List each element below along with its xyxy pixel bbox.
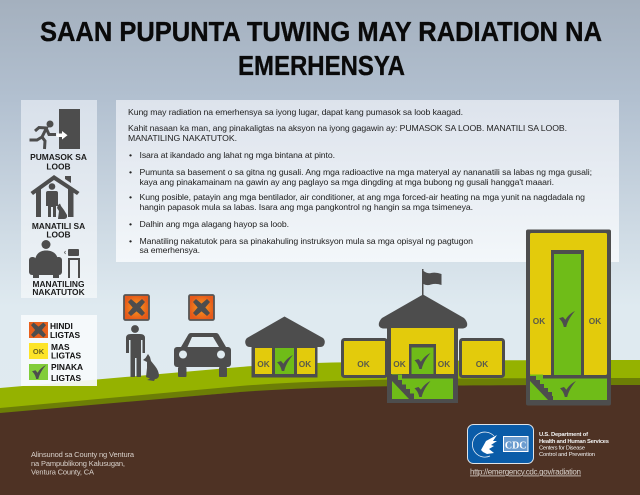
- instructions text: Dalhin ang mga alagang hayop sa loob.: [140, 219, 289, 229]
- source credit: Ventura County, CA: [31, 468, 94, 476]
- building: tall tower: OK: [589, 316, 601, 326]
- building: tall tower: OK: [533, 316, 545, 326]
- walls: [387, 327, 458, 403]
- icon: unsafe sign over person: [124, 295, 149, 320]
- label: pumasok sa loob: LOOB: [46, 162, 71, 172]
- brown ground: [0, 385, 640, 495]
- instructions text: •: [129, 167, 132, 177]
- instructions text: [128, 107, 592, 255]
- building: left wing: [342, 340, 386, 376]
- label: manatili sa loob: [32, 221, 85, 240]
- icon: person in armchair with radio: [29, 240, 80, 278]
- panel: instructions: [116, 100, 619, 262]
- label: pumasok sa loob: [30, 152, 87, 172]
- building: tall tower: [526, 230, 611, 406]
- instructions text: MANATILING NAKATUTOK.: [128, 133, 237, 143]
- basement: [392, 374, 453, 399]
- flag: [422, 269, 442, 296]
- instructions text: Isara at ikandado ang lahat ng mga bintana at pinto.: [140, 150, 335, 160]
- agency name: [539, 432, 609, 458]
- grass hill: [0, 360, 640, 413]
- icon: person entering door: [30, 109, 80, 149]
- legend: safest: LIGTAS: [51, 373, 81, 383]
- grass shadow: [0, 378, 640, 414]
- logo: CDC HHS: CDC: [505, 440, 527, 452]
- building: small house: OK: [257, 359, 270, 369]
- legend: unsafe: LIGTAS: [50, 330, 80, 340]
- roof: [379, 294, 467, 328]
- title: SAAN PUPUNTA TUWING MAY RADIATION NA: [40, 16, 602, 47]
- legend: unsafe: [29, 321, 80, 340]
- legend: safest: [29, 362, 83, 383]
- instructions text: Manatiling nakatutok para sa pinakahuling instruksyon mula sa mga opisyal ng pagtugon: [140, 236, 473, 246]
- icon: car: [174, 333, 231, 377]
- icon: person outdoors: [126, 325, 145, 377]
- agency name: U.S. Department of: [539, 432, 588, 438]
- instructions text: sa emerhensya.: [140, 245, 200, 255]
- instructions text: Kahit nasaan ka man, ang pinakaligtas na aksyon na iyong gagawin ay: PUMASOK SA LOOB. MANATILI SA LOOB.: [128, 123, 567, 133]
- source credit: Alinsunod sa County ng Ventura: [31, 450, 135, 459]
- label: manatili sa loob: LOOB: [46, 230, 71, 240]
- building: right wing: [460, 340, 504, 376]
- instructions text: Kung posible, patayin ang mga bentilador, air conditioner, at ang mga forced-air heating na mga yunit na nagdadala ng: [140, 192, 585, 202]
- title: [40, 16, 602, 81]
- label: manatiling nakatutok: MANATILING: [33, 279, 84, 289]
- building: left wing: OK: [357, 359, 370, 369]
- instructions text: •: [129, 192, 132, 202]
- instructions text: Kung may radiation na emerhensya sa iyong lugar, dapat kang pumasok sa loob kaagad.: [128, 107, 463, 117]
- label: manatili sa loob: MANATILI SA: [32, 221, 85, 231]
- instructions text: hangin papasok mula sa labas. Isara ang mga pangkontrol ng hangin sa mga tsimeneya.: [140, 202, 473, 212]
- label: manatiling nakatutok: NAKATUTOK: [32, 287, 85, 297]
- panel: legend: [21, 315, 97, 386]
- url link: http://emergency.cdc.gov/radiation: [470, 468, 581, 476]
- icon: unsafe sign over car: [189, 295, 214, 320]
- legend: safer: OK: [33, 347, 45, 356]
- instructions text: •: [129, 150, 132, 160]
- building: small house: OK: [299, 359, 311, 369]
- building: house with basement and flag: OK: [438, 359, 450, 369]
- legend: safer: [29, 342, 81, 360]
- agency name: Control and Prevention: [539, 452, 595, 458]
- label: pumasok sa loob: PUMASOK SA: [30, 152, 87, 162]
- instructions text: kaya ang pinakamainam na gawin ay ang paglayo sa mga dingding at mga bubong ng gusali hangga't maaari.: [140, 177, 554, 187]
- logo: CDC HHS: [468, 424, 534, 464]
- source credit: [31, 450, 135, 476]
- legend: unsafe: HINDI: [50, 321, 73, 331]
- source credit: na Pampublikong Kalusugan,: [31, 459, 125, 468]
- agency name: Health and Human Services: [539, 439, 609, 445]
- legend: safer: MAS: [51, 342, 70, 352]
- instructions text: •: [129, 236, 132, 246]
- panel: actions sidebar: [21, 100, 97, 298]
- title: EMERHENSYA: [238, 50, 405, 81]
- label: manatiling nakatutok: [32, 279, 85, 297]
- agency name: Centers for Disease: [539, 446, 585, 452]
- legend: safer: LIGTAS: [51, 350, 81, 360]
- icon: dog: [143, 354, 159, 381]
- legend: safest: PINAKA: [51, 362, 83, 372]
- stairs: [392, 375, 414, 399]
- building: right wing: OK: [476, 359, 488, 369]
- icon: person and dog in house: [30, 175, 80, 219]
- instructions text: Pumunta sa basement o sa gitna ng gusali. Ang mga radioactive na mga materyal ay nananatili sa labas ng mga gusali;: [140, 167, 592, 177]
- building: house with basement and flag: OK: [393, 359, 406, 369]
- building: small house: [245, 316, 325, 378]
- instructions text: •: [129, 219, 132, 229]
- building: house with basement and flag: [379, 269, 467, 403]
